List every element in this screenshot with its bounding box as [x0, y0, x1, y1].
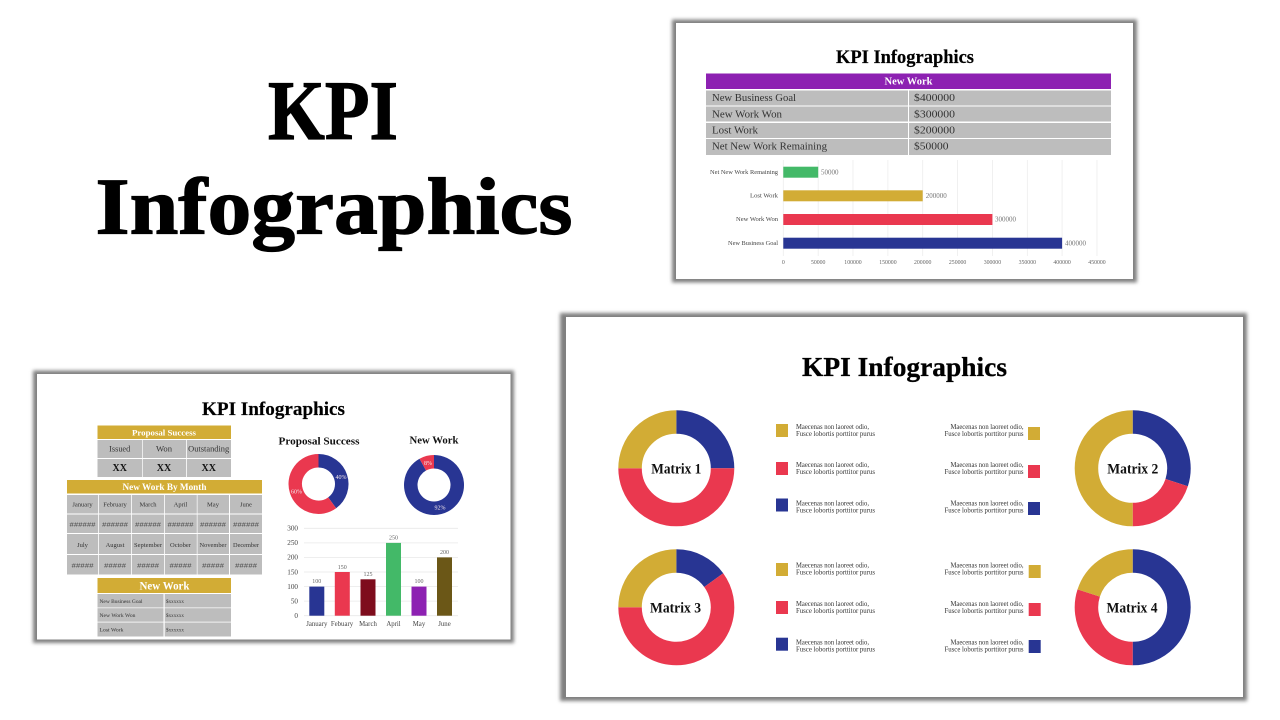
table: new work by month: May	[207, 502, 220, 508]
legend: matrix 3: Maecenas non laoreet odio,	[796, 562, 869, 570]
table: proposal success: XX	[157, 463, 172, 474]
bar chart: monthly values: January	[306, 621, 328, 628]
table: proposal success	[98, 426, 231, 477]
donut chart: proposal success: 40%	[336, 475, 346, 481]
donut chart: proposal success: 60%	[291, 490, 302, 496]
donut chart: new work	[410, 436, 459, 512]
table: new work summary: $xxxxxx	[166, 600, 185, 605]
legend: matrix 3: Maecenas non laoreet odio,	[796, 638, 869, 646]
bar chart: monthly values: 100	[312, 579, 321, 585]
legend: matrix 3	[776, 562, 875, 654]
donut chart: proposal success	[278, 436, 360, 507]
bar chart: monthly values: March	[359, 621, 377, 628]
legend: matrix 2: Maecenas non laoreet odio,	[950, 423, 1024, 431]
panel: new work slide	[672, 20, 1137, 282]
bar chart: monthly values: April	[386, 621, 401, 628]
table: new work by month: March	[140, 502, 157, 508]
donut chart: new work: 8%	[424, 461, 432, 467]
bar chart: monthly values: May	[413, 621, 426, 628]
slide heading: KPI Infographics	[802, 352, 1007, 382]
table: proposal success: XX	[112, 463, 128, 474]
bar chart: new work values: New Work Won	[736, 217, 778, 223]
main title: Infographics	[96, 164, 572, 252]
legend: matrix 2: Fusce lobortis porttitor purus	[944, 506, 1024, 514]
table: new work by month	[67, 480, 262, 574]
legend: matrix 1: Maecenas non laoreet odio,	[796, 423, 869, 431]
table: new work by month: ######	[102, 522, 128, 528]
table: new work by month: December	[233, 542, 260, 549]
legend: matrix 1: Fusce lobortis porttitor purus	[796, 468, 875, 476]
legend: matrix 4	[944, 562, 1041, 654]
legend: matrix 4: Maecenas non laoreet odio,	[950, 562, 1024, 570]
table: new work by month: April	[174, 502, 188, 508]
table: new work by month: June	[240, 502, 252, 508]
bar chart: new work values: 400000	[1065, 239, 1086, 247]
bar chart: new work values: 100000	[844, 260, 862, 266]
donut chart: proposal success: Proposal Success	[278, 436, 360, 448]
bar chart: monthly values	[287, 525, 458, 628]
bar chart: monthly values: 250	[389, 536, 398, 542]
table: new work summary: New Business Goal	[100, 600, 143, 605]
legend: matrix 4: Fusce lobortis porttitor purus	[944, 607, 1024, 615]
bar chart: monthly values: 200	[287, 554, 298, 562]
table: new work summary: New Work	[140, 580, 190, 592]
donut chart: matrix 3	[630, 561, 723, 654]
donut chart: matrix 1: Matrix 1	[651, 462, 701, 478]
table: new work: New Work	[884, 76, 933, 88]
legend: matrix 2: Maecenas non laoreet odio,	[950, 461, 1024, 469]
legend: matrix 2	[944, 423, 1040, 515]
panel: matrix slide	[560, 313, 1247, 701]
bar chart: new work values: 300000	[995, 216, 1016, 224]
main title	[96, 64, 572, 252]
table: new work summary	[98, 578, 231, 636]
bar chart: monthly values: 100	[414, 579, 424, 585]
legend: matrix 2: Maecenas non laoreet odio,	[950, 499, 1024, 507]
bar chart: new work values: 200000	[914, 260, 931, 266]
donut chart: new work: New Work	[410, 436, 459, 446]
table: new work by month: ######	[70, 522, 96, 528]
legend: matrix 1	[776, 423, 875, 514]
table: new work by month: #####	[170, 564, 192, 570]
bar chart: monthly values: 200	[440, 550, 449, 556]
bar chart: monthly values: Febuary	[331, 621, 354, 628]
table: new work by month: January	[72, 502, 93, 508]
donut chart: matrix 1	[630, 422, 723, 515]
bar chart: new work values: 50000	[821, 168, 839, 176]
bar chart: monthly values: 150	[287, 568, 298, 576]
table: new work: New Work Won	[712, 110, 783, 120]
bar chart: new work values: 450000	[1088, 260, 1106, 266]
table: proposal success: Issued	[109, 444, 130, 454]
legend: matrix 3: Fusce lobortis porttitor purus	[796, 646, 875, 654]
table: new work by month: July	[77, 542, 89, 549]
table: new work: Net New Work Remaining	[712, 142, 828, 152]
table: new work: $300000	[914, 110, 955, 120]
bar chart: monthly values: 100	[287, 583, 298, 591]
legend: matrix 1: Fusce lobortis porttitor purus	[796, 506, 875, 514]
donut chart: matrix 2	[1086, 422, 1179, 515]
legend: matrix 1: Maecenas non laoreet odio,	[796, 461, 869, 469]
bar chart: monthly values: 50	[291, 597, 298, 605]
table: new work by month: #####	[72, 564, 94, 570]
table: proposal success: Won	[156, 444, 172, 454]
slide heading: KPI Infographics	[836, 47, 974, 68]
legend: matrix 4: Fusce lobortis porttitor purus	[944, 646, 1024, 654]
bar chart: monthly values: June	[438, 621, 451, 628]
bar chart: new work values: 350000	[1019, 260, 1036, 266]
legend: matrix 4: Maecenas non laoreet odio,	[950, 638, 1024, 646]
bar chart: new work values: 300000	[984, 260, 1001, 266]
legend: matrix 3: Fusce lobortis porttitor purus	[796, 568, 875, 576]
table: new work by month: ######	[200, 522, 226, 528]
slide heading: KPI Infographics	[202, 399, 345, 420]
bar chart: new work values: 400000	[1053, 260, 1071, 266]
bar chart: new work values: 150000	[879, 260, 897, 266]
bar chart: monthly values: 0	[294, 612, 298, 620]
table: new work by month: #####	[235, 564, 257, 570]
table: new work by month: August	[106, 542, 125, 549]
table: new work by month: February	[103, 502, 127, 508]
bar chart: new work values	[710, 160, 1106, 266]
bar chart: new work values: 200000	[926, 192, 947, 200]
legend: matrix 2: Fusce lobortis porttitor purus	[944, 430, 1024, 438]
table: new work	[706, 74, 1111, 155]
legend: matrix 2: Fusce lobortis porttitor purus	[944, 468, 1024, 476]
table: new work by month: ######	[233, 522, 259, 528]
table: new work by month: ######	[168, 522, 194, 528]
table: new work: $50000	[914, 142, 948, 152]
table: new work: New Business Goal	[712, 93, 796, 104]
table: new work: $400000	[914, 93, 955, 104]
table: new work summary: New Work Won	[100, 614, 136, 619]
bar chart: monthly values: 250	[287, 539, 298, 547]
table: new work summary: $xxxxxx	[166, 628, 185, 634]
table: proposal success: Proposal Success	[132, 428, 197, 438]
donut chart: matrix 2: Matrix 2	[1107, 462, 1158, 478]
table: new work: $200000	[914, 126, 955, 136]
bar chart: new work values: Net New Work Remaining	[710, 170, 778, 176]
bar chart: monthly values: 150	[338, 565, 347, 571]
table: new work by month: #####	[202, 564, 224, 570]
donut chart: matrix 4: Matrix 4	[1106, 600, 1158, 616]
table: new work by month: September	[134, 542, 163, 549]
table: new work by month: #####	[137, 564, 159, 570]
donut chart: new work: 92%	[434, 506, 446, 512]
table: new work summary: $xxxxxx	[166, 614, 185, 619]
legend: matrix 4: Fusce lobortis porttitor purus	[944, 568, 1024, 576]
legend: matrix 1: Maecenas non laoreet odio,	[796, 499, 869, 507]
bar chart: new work values: 50000	[811, 260, 826, 266]
bar chart: monthly values: 300	[287, 525, 298, 533]
bar chart: new work values: 0	[782, 260, 785, 266]
table: new work by month: October	[170, 542, 192, 549]
table: new work by month: New Work By Month	[122, 483, 207, 493]
main title: KPI	[268, 64, 398, 158]
legend: matrix 1: Fusce lobortis porttitor purus	[796, 430, 875, 438]
bar chart: new work values: New Business Goal	[728, 241, 778, 247]
legend: matrix 3: Maecenas non laoreet odio,	[796, 600, 869, 608]
table: new work: Lost Work	[712, 126, 759, 136]
table: new work summary: Lost Work	[100, 628, 124, 634]
donut chart: matrix 3: Matrix 3	[650, 600, 701, 616]
table: proposal success: XX	[201, 463, 217, 474]
table: new work by month: #####	[104, 564, 126, 570]
legend: matrix 3: Fusce lobortis porttitor purus	[796, 607, 875, 615]
donut chart: matrix 4	[1086, 561, 1179, 654]
legend: matrix 4: Maecenas non laoreet odio,	[950, 600, 1024, 608]
table: new work by month: ######	[135, 522, 161, 528]
bar chart: new work values: Lost Work	[750, 194, 778, 200]
bar chart: new work values: 250000	[949, 260, 966, 266]
table: new work by month: November	[200, 542, 227, 549]
table: proposal success: Outstanding	[188, 444, 229, 454]
bar chart: monthly values: 125	[364, 572, 372, 578]
panel: proposal success slide	[33, 370, 514, 643]
